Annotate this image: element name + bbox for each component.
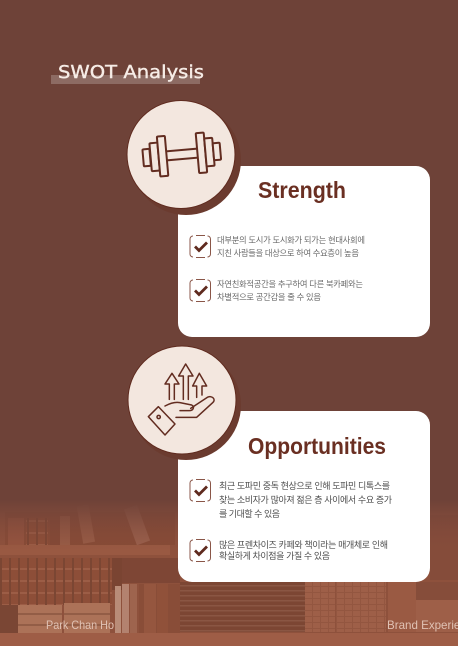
card: Strength background bbox=[178, 166, 430, 337]
heading: Opportunities: Opportunities bbox=[248, 433, 386, 459]
text: opportunities point 1: 최근 도파민 중독 현상으로 인해 도파민 디톡스를 bbox=[219, 481, 390, 491]
text: opportunities point 2: 확실하게 차이점을 가질 수 있음 bbox=[219, 550, 330, 561]
text: opportunities point 1: 를 기대할 수 있음 bbox=[219, 508, 280, 519]
text: strength point 2: 차별적으로 공간감을 줄 수 있음 bbox=[217, 292, 321, 302]
icon: checkbox bbox=[190, 236, 210, 258]
icon: checkbox bbox=[190, 280, 210, 302]
text: strength point 2: 자연친화적공간을 추구하여 다른 북카페와는 bbox=[217, 279, 363, 289]
icon: checkbox bbox=[190, 480, 210, 502]
text: strength point 2 bbox=[217, 279, 363, 302]
icon: checkbox bbox=[190, 540, 210, 562]
background: bookshelf photo bbox=[0, 500, 458, 646]
footer: author name: Park Chan Ho bbox=[46, 618, 114, 632]
text: strength point 1: 지친 사람들을 대상으로 하여 수요층이 높음 bbox=[217, 248, 359, 258]
text: opportunities point 2 bbox=[219, 539, 388, 561]
panel: Strength bbox=[127, 100, 430, 337]
text: opportunities point 1: 찾는 소비자가 많아져 젊은 층 사이에서 수요 증가 bbox=[219, 494, 392, 505]
text: opportunities point 2: 많은 프렌차이즈 카페와 책이라는 매개체로 인해 bbox=[219, 539, 388, 550]
text: strength point 1 bbox=[217, 235, 365, 258]
card: Opportunities background bbox=[178, 411, 430, 582]
text: opportunities point 1 bbox=[219, 481, 392, 519]
text: strength point 1: 대부분의 도시가 도시화가 되가는 현대사회에 bbox=[217, 235, 365, 245]
icon: dumbbell in circle bbox=[127, 100, 241, 215]
icon: hand with rising arrows in circle bbox=[128, 346, 241, 460]
heading: Strength: Strength bbox=[258, 177, 346, 203]
heading: SWOT Analysis: SWOT Analysis bbox=[58, 62, 204, 83]
panel: Opportunities bbox=[128, 346, 430, 582]
